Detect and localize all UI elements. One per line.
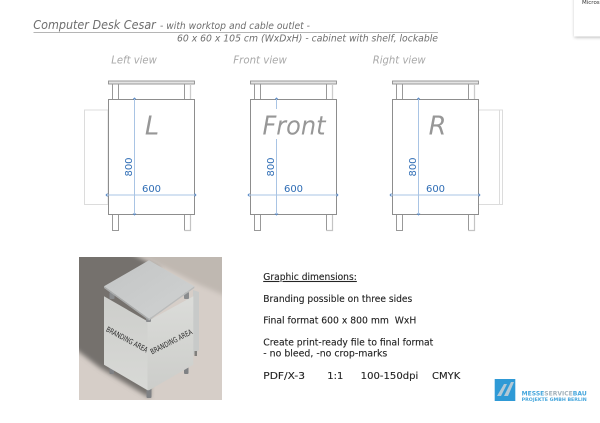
graphic dimensions text: Create print-ready file to final format (263, 337, 433, 348)
desk legs (110, 364, 188, 398)
graphic dimensions text: Final format 600 x 800 mm WxH (263, 316, 416, 327)
graphic dimensions text: 1:1 (327, 371, 343, 382)
graphic dimensions text: Branding possible on three sides (263, 294, 412, 305)
view label: right: Right view (373, 54, 426, 66)
graphic dimensions text: 100-150dpi (361, 371, 418, 382)
logo: Messe Service Bau: PROJEKTE GMBH BERLIN (522, 397, 587, 403)
drawing: left view: 600 (142, 184, 161, 195)
product render photo (79, 257, 222, 400)
logo: Messe Service Bau: MESSESERVICEBAU (522, 392, 587, 398)
branding label: right side: BRANDING AREA (149, 327, 194, 356)
drawing: right view: 600 (426, 184, 445, 195)
graphic dimensions text: CMYK (432, 371, 461, 382)
drawing: front view (248, 81, 338, 230)
view label: front: Front view (233, 54, 287, 66)
drawing: left view: 800 (124, 157, 135, 177)
title (33, 18, 438, 44)
drawing: right view: R (429, 111, 446, 141)
desk right face (148, 296, 193, 390)
graphic dimensions text: PDF/X-3 (263, 371, 305, 382)
logo: Messe Service Bau (495, 379, 587, 403)
drawing: right view (390, 81, 502, 230)
drawing: right view: 800 (408, 157, 419, 177)
title: Computer Desk Cesar (33, 18, 157, 32)
popup window fragment: Micros (582, 0, 600, 6)
desk top (104, 260, 194, 320)
drawing: left view: L (145, 111, 159, 141)
desk left face (104, 296, 148, 390)
graphic dimensions text (263, 272, 461, 382)
popup window fragment (574, 0, 600, 38)
drawing: front view: 800 (266, 157, 277, 177)
branding label: left side: BRANDING AREA (105, 325, 150, 355)
title: - with worktop and cable outlet - (160, 21, 311, 32)
drawing: front view: Front (262, 111, 326, 141)
title: 60 x 60 x 105 cm (WxDxH) - cabinet with shelf, lockable (177, 33, 438, 44)
graphic dimensions text: Graphic dimensions: (263, 272, 357, 283)
drawing: left view (84, 81, 196, 230)
drawing: front view: 600 (284, 184, 303, 195)
graphic dimensions text: - no bleed, -no crop-marks (263, 348, 387, 359)
desk top supports (110, 292, 189, 322)
view label: left: Left view (111, 54, 157, 66)
